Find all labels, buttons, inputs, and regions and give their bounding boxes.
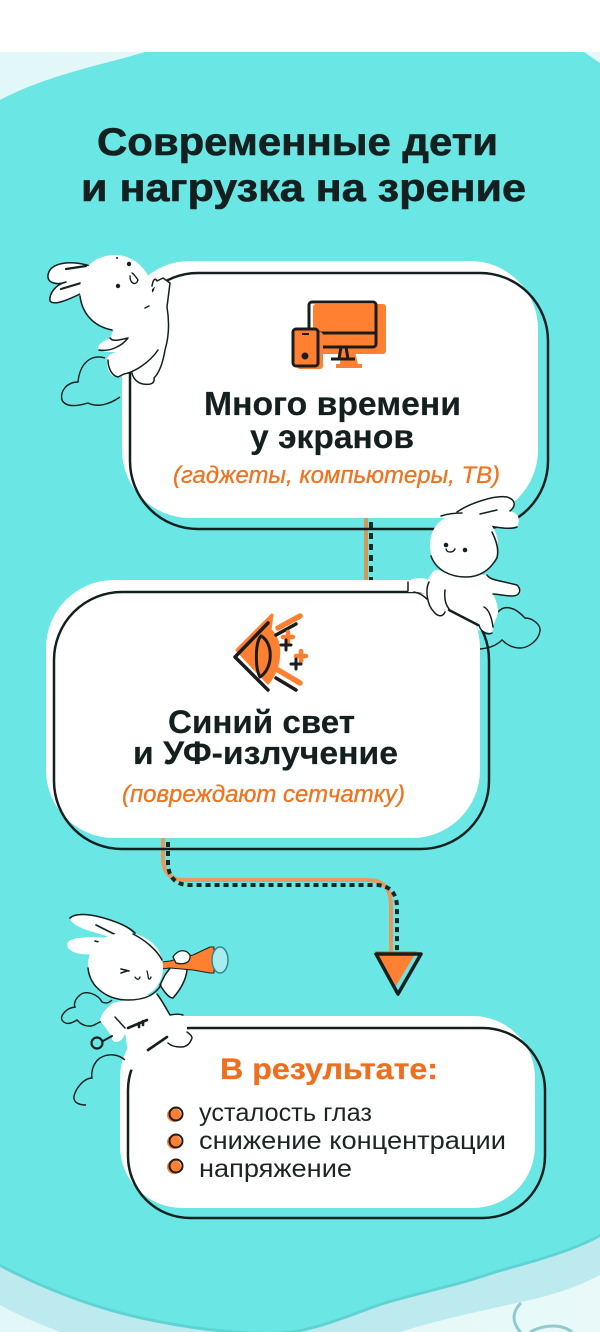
note: retina: (повреждают сетчатку)	[122, 781, 405, 808]
heading: screens	[204, 385, 461, 455]
heading: blue light: Синий свет	[168, 704, 355, 740]
icon: eye with rays	[235, 615, 306, 690]
connector: card 2 to result arrow	[163, 838, 397, 955]
icon: bunny sitting on card 2	[408, 497, 521, 634]
heading: blue light	[133, 704, 398, 771]
icon: key	[92, 1020, 147, 1048]
title: Современные дети	[97, 121, 498, 164]
list: effects: напряжение	[199, 1155, 352, 1183]
icon: telescope	[153, 947, 228, 973]
arrow head	[375, 951, 421, 994]
list: effects: снижение концентрации	[199, 1127, 506, 1155]
panel: card 2 blue light	[46, 580, 489, 849]
connector: card 1 to card 2	[366, 518, 371, 580]
note: gadgets: (гаджеты, компьютеры, ТВ)	[173, 462, 500, 489]
title	[81, 121, 526, 210]
heading: screens: у экранов	[250, 418, 414, 455]
list: effects: усталость глаз	[199, 1099, 372, 1127]
icon: cloud behind bunny 1	[62, 357, 120, 406]
heading: result: В результате:	[220, 1053, 438, 1086]
title: и нагрузка на зрение	[81, 167, 526, 210]
icon: bunny climbing card 1	[48, 255, 170, 384]
icon: monitor and phone	[293, 302, 386, 369]
icon: bunny with telescope	[67, 914, 228, 1070]
icon: cloud behind bunny 2	[480, 608, 540, 649]
heading: blue light: и УФ-излучение	[133, 735, 398, 771]
heading: screens: Много времени	[204, 385, 461, 422]
icon: clouds near bunny 3	[62, 993, 125, 1105]
panel: card 1 screens	[122, 261, 548, 529]
list: effects	[167, 1099, 506, 1183]
panel: card 3 result	[120, 1016, 545, 1218]
